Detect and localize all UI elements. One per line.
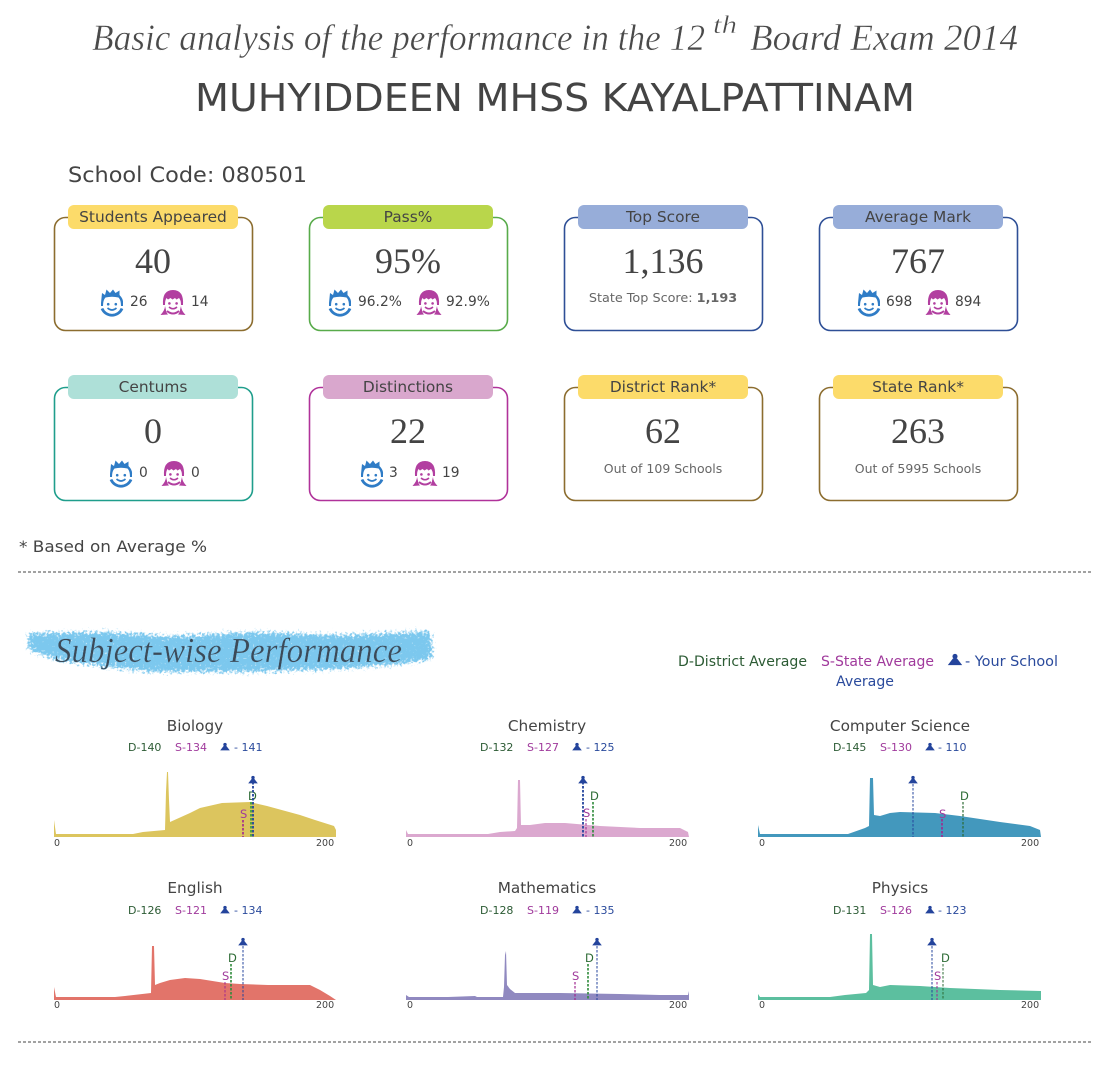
heading: average mark	[833, 205, 1003, 229]
legend: D-District Average	[678, 654, 807, 670]
girls average: 894	[955, 294, 981, 310]
marker: state average: S	[572, 969, 579, 983]
icon: girl	[412, 461, 438, 486]
chart: biology: 200	[316, 838, 334, 849]
chart: physics: D-131	[833, 904, 866, 917]
distribution area	[758, 934, 1041, 1000]
legend: - Your School	[965, 654, 1058, 670]
chart: english: 0	[54, 1000, 60, 1011]
chart: mathematics: - 135	[586, 904, 614, 917]
heading: state rank	[833, 375, 1003, 399]
chart: biology: Biology	[167, 717, 223, 735]
marker: district average	[228, 951, 237, 1000]
legend: Average	[836, 674, 894, 690]
girls count: 14	[191, 294, 209, 310]
panel: distinctions	[310, 375, 508, 500]
title: th	[713, 12, 737, 39]
school name: MUHYIDDEEN MHSS KAYALPATTINAM	[195, 76, 915, 120]
heading: students appeared	[68, 205, 238, 229]
chart: english: D-126	[128, 904, 161, 917]
marker: district average	[585, 951, 594, 1000]
value: 767	[891, 241, 945, 281]
panel: district rank	[564, 375, 762, 500]
chart: computer science: Computer Science	[830, 717, 970, 735]
heading: centums: Centums	[119, 378, 187, 396]
marker: state average: S	[583, 806, 590, 820]
chart: mathematics: D-128	[480, 904, 513, 917]
marker: district average: D	[590, 789, 599, 803]
value: 40	[135, 241, 171, 281]
panel: top score	[564, 205, 762, 330]
distribution area	[406, 951, 689, 1000]
heading: distinctions: Distinctions	[363, 378, 453, 396]
heading: state rank: State Rank*	[872, 378, 964, 396]
value: 1,136	[622, 241, 704, 281]
girls distinctions: 19	[442, 465, 460, 481]
chart: mathematics: S-119	[527, 904, 559, 917]
chart: mathematics: 0	[407, 1000, 413, 1011]
section heading: subject-wise performance: Subject-wise Performance	[55, 631, 402, 670]
value: 22	[390, 411, 426, 451]
distribution area	[54, 946, 336, 1000]
boys distinctions: 3	[389, 465, 398, 481]
school code: School Code: 080501	[68, 163, 307, 188]
girls pass percent: 92.9%	[446, 294, 490, 310]
title: Basic analysis of the performance in the 12	[92, 18, 705, 59]
marker: district average	[960, 789, 969, 837]
chart: english	[54, 879, 336, 1011]
girls centums: 0	[191, 465, 200, 481]
heading: top score	[578, 205, 748, 229]
value: 263	[891, 411, 945, 451]
chart: mathematics: 200	[669, 1000, 687, 1011]
boys pass percent: 96.2%	[358, 294, 402, 310]
marker: district average	[590, 789, 599, 837]
chart: english: S-121	[175, 904, 207, 917]
marker: state average: S	[934, 969, 941, 983]
icon: boy	[101, 290, 123, 315]
value: 95%	[375, 241, 441, 281]
chart: computer science	[758, 717, 1041, 849]
out of schools: Out of 109 Schools	[604, 461, 722, 476]
boys count: 26	[130, 294, 148, 310]
marker: state average: S	[240, 807, 247, 821]
marker: state average: S	[222, 969, 229, 983]
chart: biology: 0	[54, 838, 60, 849]
icon: boy	[858, 290, 880, 315]
chart: physics: S-126	[880, 904, 912, 917]
icon: boy	[361, 460, 383, 486]
chart: chemistry	[406, 717, 689, 849]
heading: students appeared: Students Appeared	[79, 208, 227, 226]
marker: district average: D	[228, 951, 237, 965]
chart: chemistry: 0	[407, 838, 413, 849]
chart: computer science: 0	[759, 838, 765, 849]
heading: pass percent	[323, 205, 493, 229]
marker: district average: D	[248, 789, 257, 803]
footnote: * Based on Average %	[19, 537, 207, 556]
panel: centums	[54, 375, 252, 500]
marker: state average: S	[939, 807, 946, 821]
chart: physics	[758, 879, 1041, 1011]
chart: english: - 134	[234, 904, 262, 917]
marker: state average	[572, 969, 579, 1000]
chart: computer science: D-145	[833, 741, 866, 754]
marker: your school	[927, 938, 937, 1000]
chart: chemistry: 200	[669, 838, 687, 849]
value: 0	[144, 411, 162, 451]
marker: state average	[240, 807, 247, 837]
marker: your school	[592, 938, 602, 1000]
icon: girl	[160, 290, 186, 315]
state top score: State Top Score: 1,193	[589, 291, 737, 306]
distribution area	[54, 772, 336, 837]
marker: district average	[941, 951, 950, 1000]
chart: english: English	[167, 879, 223, 897]
marker: state average	[583, 806, 590, 837]
icon: boy	[110, 460, 132, 486]
heading: distinctions	[323, 375, 493, 399]
distribution area	[758, 778, 1041, 837]
boys centums: 0	[139, 465, 148, 481]
icon: boy	[329, 290, 351, 315]
icon: girl	[416, 290, 442, 315]
chart: chemistry: Chemistry	[508, 717, 586, 735]
chart: computer science: S-130	[880, 741, 912, 754]
panel: students appeared	[54, 205, 252, 330]
value: 62	[645, 411, 681, 451]
icon: girl	[926, 290, 950, 315]
heading: top score: Top Score	[625, 208, 700, 226]
title: Board Exam 2014	[750, 18, 1018, 59]
panel: average mark	[820, 205, 1018, 330]
panel: state rank	[820, 375, 1018, 500]
panel: pass percent	[310, 205, 508, 330]
chart: chemistry: S-127	[527, 741, 559, 754]
chart: biology: D-140	[128, 741, 161, 754]
distribution area	[406, 780, 689, 837]
marker: district average: D	[941, 951, 950, 965]
legend: S-State Average	[821, 654, 934, 670]
heading: district rank: District Rank*	[610, 378, 716, 396]
marker: district average	[248, 789, 257, 837]
heading: district rank	[578, 375, 748, 399]
marker: your school	[578, 776, 588, 837]
chart: mathematics	[406, 879, 689, 1011]
heading: average mark: Average Mark	[865, 208, 971, 226]
marker: state average	[934, 969, 941, 1000]
legend	[678, 654, 1058, 690]
chart: chemistry: - 125	[586, 741, 614, 754]
marker: your school	[248, 776, 258, 837]
boys average: 698	[886, 294, 912, 310]
marker: district average: D	[960, 789, 969, 803]
marker: state average	[939, 807, 946, 837]
chart: chemistry: D-132	[480, 741, 513, 754]
chart: physics: Physics	[872, 879, 928, 897]
chart: biology: - 141	[234, 741, 262, 754]
chart: computer science: - 110	[938, 741, 966, 754]
chart: physics: 0	[759, 1000, 765, 1011]
icon: girl	[162, 461, 186, 486]
marker: state average	[222, 969, 229, 1000]
chart: mathematics: Mathematics	[498, 879, 596, 897]
chart: biology: S-134	[175, 741, 207, 754]
chart: biology	[54, 717, 336, 849]
out of schools: Out of 5995 Schools	[855, 461, 981, 476]
marker: your school	[238, 938, 248, 1000]
chart: english: 200	[316, 1000, 334, 1011]
title	[92, 12, 1018, 59]
marker: district average: D	[585, 951, 594, 965]
marker: your school	[908, 776, 918, 837]
chart: physics: - 123	[938, 904, 966, 917]
chart: physics: 200	[1021, 1000, 1039, 1011]
heading: centums	[68, 375, 238, 399]
chart: computer science: 200	[1021, 838, 1039, 849]
heading: pass percent: Pass%	[384, 208, 432, 226]
